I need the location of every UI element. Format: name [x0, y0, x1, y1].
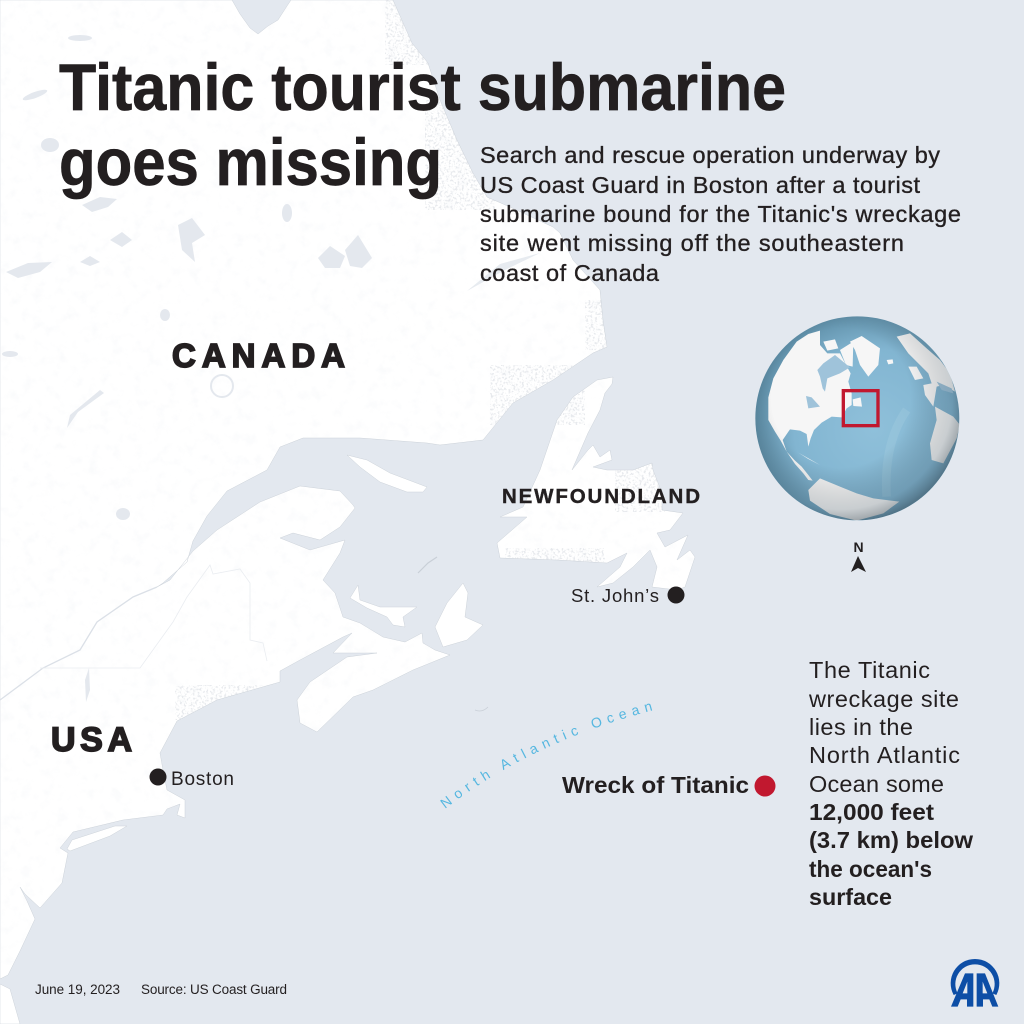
callout: wreckage depth: Ocean some [809, 771, 944, 797]
ocean ridge [886, 410, 907, 497]
north arrow [851, 539, 866, 572]
date and source: Source: US Coast Guard [141, 982, 287, 997]
Newfoundland island [497, 377, 695, 590]
marker: Wreck of Titanic: Wreck of Titanic [562, 772, 749, 798]
lower-left land fragment [0, 984, 20, 1024]
callout: wreckage depth [808, 657, 974, 910]
lakes and rivers [2, 35, 372, 702]
title [59, 50, 786, 199]
Manicouagan ring lake [211, 375, 233, 397]
Magdalen Islands [418, 557, 437, 573]
subtitle text block: site went missing off the southeastern [480, 230, 904, 256]
subtitle text block [480, 142, 961, 286]
Sable Island [475, 707, 488, 711]
north arrow: N [853, 539, 864, 555]
subtitle text block: Search and rescue operation underway by [480, 142, 940, 168]
date and source: June 19, 2023 [35, 982, 120, 997]
title: goes missing [59, 125, 442, 199]
Hudson Bay and inland water [806, 355, 953, 408]
globe land [768, 331, 960, 521]
Hamilton Inlet [467, 253, 540, 291]
land texture [0, 0, 700, 980]
callout: wreckage depth: wreckage site [808, 686, 959, 712]
coastal fjord speckle [175, 0, 665, 720]
Prince Edward Island [350, 585, 417, 627]
map of northeastern North America [0, 0, 700, 1024]
subtitle text block: coast of Canada [480, 260, 660, 286]
Cape Breton Island [435, 583, 483, 647]
Anadolu Agency logo [951, 959, 999, 1007]
Anticosti Island [347, 455, 427, 492]
title: Titanic tourist submarine [59, 50, 786, 124]
callout: wreckage depth: surface [809, 884, 892, 910]
label: North Atlantic Ocean: North Atlantic Ocean [440, 704, 652, 808]
callout: wreckage depth: (3.7 km) below [809, 827, 974, 853]
callout: wreckage depth: lies in the [809, 714, 913, 740]
land: mainland Canada and USA [0, 0, 607, 979]
callout: wreckage depth: the ocean's [809, 856, 932, 882]
locator globe [755, 316, 960, 521]
St Lawrence upper river and borders [0, 587, 157, 700]
globe shading [755, 316, 959, 520]
label: Newfoundland: NEWFOUNDLAND [502, 485, 700, 508]
locator box [843, 391, 878, 426]
marker: St. John's: St. John’s [571, 585, 659, 606]
callout: wreckage depth: 12,000 feet [809, 799, 934, 825]
callout: wreckage depth: North Atlantic [809, 742, 960, 768]
callout: wreckage depth: The Titanic [809, 657, 930, 683]
subtitle text block: US Coast Guard in Boston after a tourist [480, 172, 920, 198]
Long Island [67, 826, 127, 851]
marker: Boston: Boston [171, 769, 234, 790]
label: USA: USA [51, 721, 132, 759]
subtitle text block: submarine bound for the Titanic's wreckage [480, 201, 961, 227]
date and source [35, 982, 287, 997]
label: Canada: CANADA [172, 337, 345, 374]
